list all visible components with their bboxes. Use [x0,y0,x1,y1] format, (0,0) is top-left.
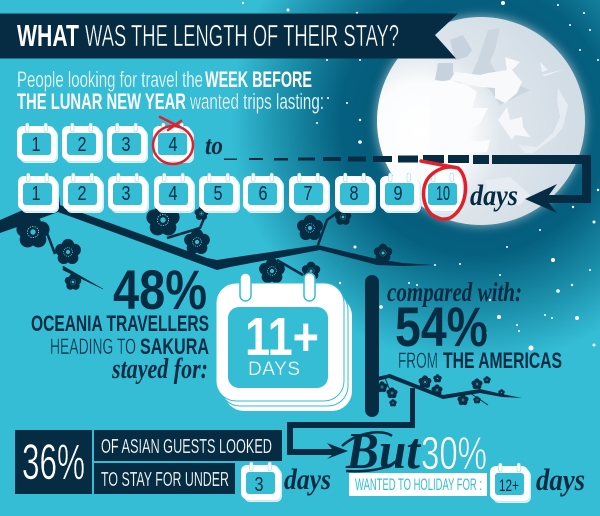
calendars row 2: 9 [394,183,402,205]
word: days by the moon: days [470,179,518,212]
intro text: THE LUNAR NEW YEAR [17,89,186,114]
big calendar 11+ days: 11+ [245,307,319,367]
stat: 48 percent Oceania [31,258,209,385]
stat: 48 percent Oceania: SAKURA [140,334,209,359]
stat: 48 percent Oceania: 48% [113,258,207,321]
word: to: to [205,131,223,160]
red circle on 10 [421,161,466,219]
calendars row 2 [18,173,464,213]
calendars row 1 [17,123,194,163]
stat: 30 percent: 30% [421,427,487,479]
script: But: But [345,423,421,480]
calendar 3: 3 [254,474,264,496]
title text: WHAT [17,18,79,53]
stars [242,1,599,350]
intro text: People looking for travel the [17,67,203,92]
vertical divider [365,275,379,417]
calendars row 1: 3 [122,134,130,156]
white bar: wanted to holiday for [349,473,487,496]
stat: 54 percent Americas: 54% [395,295,488,358]
word: days: days [536,462,585,497]
calendar 3 [241,462,282,502]
stat: 36 percent box [15,430,92,494]
branch with blossoms [0,195,433,290]
calendars row 2: 5 [214,183,222,205]
stat: 36 percent box: 36% [22,434,85,490]
connector arrow to But [287,388,415,459]
calendars row 2: 6 [258,183,268,205]
stat: 48 percent Oceania: OCEANIA TRAVELLERS [31,311,209,336]
stat: 54 percent Americas: compared with: [387,277,522,307]
red circle with cross on 4 [153,117,193,164]
title banner [0,14,458,58]
stat: 48 percent Oceania: stayed for: [111,354,208,385]
text bar: to stay for under: TO STAY FOR UNDER [101,469,229,491]
calendar 12+: 12+ [499,476,519,495]
calendars row 1: 1 [32,134,40,156]
intro text: WEEK BEFORE [205,67,312,92]
title text continued: WAS THE LENGTH OF THEIR STAY? [85,18,399,53]
calendars row 1: 2 [78,134,86,156]
text bar: of Asian guests looked: OF ASIAN GUESTS LOOKED [101,436,272,458]
big calendar 11+ days [216,273,352,411]
calendars row 2: 7 [304,183,312,205]
moon surface markings [430,28,568,205]
white bar: wanted to holiday for: WANTED TO HOLIDAY FOR : [355,475,482,494]
stat: 48 percent Oceania: HEADING TO [50,334,136,359]
calendars row 2: 1 [32,183,40,205]
calendars row 2: 2 [78,183,86,205]
small branch with blossoms [376,374,522,406]
text bar: to stay for under [94,463,235,494]
calendars row 2: 8 [350,183,358,205]
word: days: days [284,463,331,496]
moon [376,16,586,226]
calendars row 1: 4 [168,134,178,156]
calendars row 2: 3 [122,183,130,205]
calendars row 2: 4 [168,183,178,205]
intro text: wanted trips lasting: [189,89,324,114]
stat: 54 percent Americas: FROM [398,348,438,373]
text bar: of Asian guests looked [94,430,282,461]
intro text [17,67,324,114]
calendars row 2: 10 [436,183,450,205]
stat: 54 percent Americas [387,277,562,373]
dashed timeline with arrow [224,155,591,213]
calendar 12+ [490,463,531,503]
big calendar 11+ days: DAYS [248,359,300,380]
